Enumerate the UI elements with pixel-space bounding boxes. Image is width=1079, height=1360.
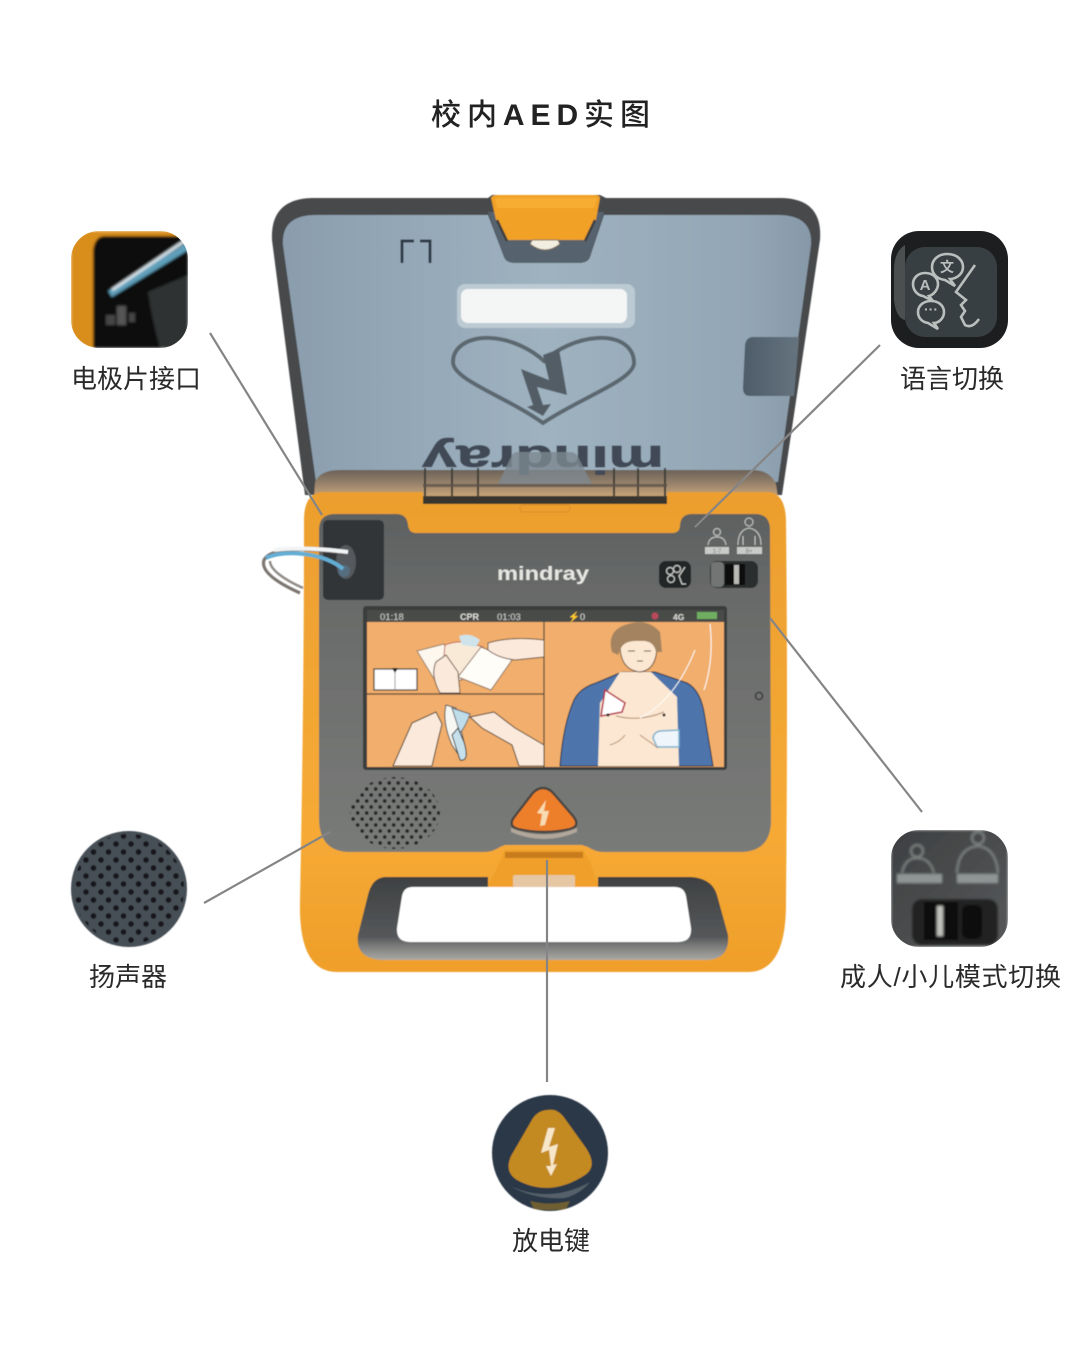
label: pad connector: 电极片接口	[71, 364, 201, 394]
status bar: 01:18	[380, 612, 404, 623]
latch	[491, 195, 600, 250]
step 3 illustration: patient	[560, 622, 713, 766]
step 2 illustration	[393, 705, 544, 766]
callout lines	[204, 333, 922, 1082]
speaker grille	[350, 777, 440, 849]
label: discharge key: 放电键	[512, 1226, 590, 1256]
open lid	[272, 195, 820, 504]
hinge	[423, 468, 667, 504]
handle latch	[488, 850, 598, 887]
lid side tab	[743, 337, 799, 396]
screen	[363, 606, 727, 770]
status bar: 01:03	[497, 612, 521, 623]
mode switch	[710, 561, 758, 588]
lid heart logo	[453, 338, 634, 423]
carrying handle	[358, 877, 728, 960]
power indicator	[755, 692, 763, 700]
status bar: 4G	[673, 612, 685, 622]
step 1 illustration	[374, 635, 544, 693]
label: adult/child mode: 成人/小儿模式切换	[840, 962, 1061, 992]
panel dividers	[367, 622, 544, 767]
discharge button	[511, 788, 577, 839]
orange body	[300, 492, 787, 972]
title: 校内AED实图	[431, 99, 650, 132]
age icons: 1-7	[713, 549, 722, 555]
age icons	[705, 518, 762, 555]
gray control panel	[319, 514, 771, 852]
thumbnail: discharge key	[492, 1095, 608, 1211]
thumbnail: language button: A	[920, 277, 931, 294]
label: language switch: 语言切换	[900, 364, 1004, 394]
language button	[659, 561, 691, 588]
pad connector	[263, 520, 384, 600]
brand logo: mindray	[497, 564, 590, 585]
thumbnail: speaker	[71, 831, 187, 947]
AED device	[263, 195, 820, 972]
thumbnail: language button: 文	[940, 259, 954, 275]
lid bottom strip	[314, 470, 778, 498]
age icons: 8+	[746, 549, 753, 555]
mirrored brand: mindray	[422, 437, 664, 480]
thumbnail: language button	[891, 231, 1008, 348]
infographic canvas	[70, 99, 1060, 1252]
label: speaker: 扬声器	[89, 962, 167, 992]
status bar	[367, 610, 724, 623]
thumbnail: language button: ···	[924, 301, 938, 317]
status bar: ⚡0	[568, 611, 585, 623]
lid clip	[402, 241, 430, 263]
status bar: CPR	[460, 612, 480, 622]
label window	[457, 284, 635, 328]
thumbnail: adult/child mode	[891, 830, 1008, 947]
thumbnail: pad connector	[71, 231, 188, 348]
